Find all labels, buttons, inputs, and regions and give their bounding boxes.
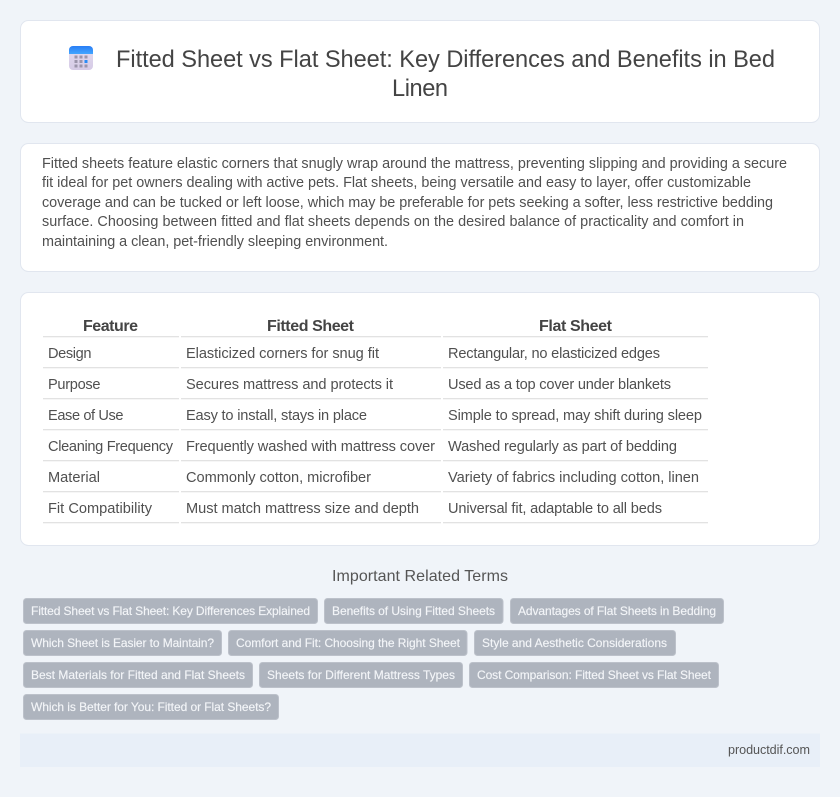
table row: cleaning frequency [48, 439, 677, 455]
tag: Best Materials for Fitted and Flat Sheets [31, 668, 245, 682]
tag [24, 630, 222, 656]
table row: purpose [48, 377, 671, 393]
tag [24, 694, 278, 720]
title: Linen [392, 76, 448, 102]
table row: cleaning frequency: Cleaning Frequency [48, 439, 174, 455]
table row: ease of use: Ease of Use [48, 408, 124, 424]
title [116, 47, 775, 102]
text block: introduction paragraph: maintaining a clean, pet-friendly sleeping environment. [42, 234, 388, 250]
table row: ease of use [48, 408, 702, 424]
table row: purpose: Purpose [48, 377, 100, 393]
footer [20, 734, 820, 767]
tag [24, 662, 252, 688]
panel: title card [20, 20, 820, 122]
footer source text: productdif.com [728, 743, 810, 757]
table row: ease of use: Easy to install, stays in place [186, 408, 367, 424]
tag: Cost Comparison: Fitted Sheet vs Flat Sheet [477, 668, 712, 682]
table row: material: Commonly cotton, microfiber [186, 470, 371, 486]
text block: introduction paragraph: fit ideal for pet owners dealing with active pets. Flat sheets, being versatile and easy to layer, offer customizable [42, 175, 751, 191]
tag [510, 598, 724, 624]
text block: introduction paragraph: Fitted sheets feature elastic corners that snugly wrap around the mattress, preventing slipping and providing a secure [42, 156, 787, 172]
table row: material [48, 470, 699, 486]
table row: cleaning frequency: Washed regularly as part of bedding [448, 439, 677, 455]
tag: Comfort and Fit: Choosing the Right Sheet [236, 636, 461, 650]
table row: fit compatibility [48, 501, 662, 517]
table row: material: Material [48, 470, 100, 486]
table header: Flat Sheet [539, 318, 613, 335]
table header: Feature [83, 318, 138, 335]
table row: fit compatibility: Must match mattress size and depth [186, 501, 419, 517]
table row: design: Elasticized corners for snug fit [186, 346, 379, 362]
tag [260, 662, 462, 688]
table header [83, 318, 613, 335]
tag [324, 598, 503, 624]
table row: design: Rectangular, no elasticized edges [448, 346, 660, 362]
tag: Benefits of Using Fitted Sheets [332, 604, 495, 618]
title: Fitted Sheet vs Flat Sheet: Key Differences and Benefits in Bed [116, 47, 775, 73]
tag [470, 662, 718, 688]
table row: purpose: Secures mattress and protects it [186, 377, 393, 393]
icon: calendar [69, 46, 93, 70]
panel: comparison table [20, 292, 820, 546]
table row: purpose: Used as a top cover under blankets [448, 377, 671, 393]
tag: Advantages of Flat Sheets in Bedding [518, 604, 716, 618]
table row: material: Variety of fabrics including cotton, linen [448, 470, 699, 486]
tag [24, 598, 318, 624]
text block: introduction paragraph: surface. Choosing between fitted and flat sheets depends on the desired balance of practicality and comfort in [42, 214, 744, 230]
tag: Style and Aesthetic Considerations [482, 636, 667, 650]
table row: design: Design [48, 346, 92, 362]
table row: fit compatibility: Fit Compatibility [48, 501, 153, 517]
panel: introduction [20, 144, 820, 272]
table row: cleaning frequency: Frequently washed with mattress cover [186, 439, 435, 455]
text block: introduction paragraph [42, 156, 787, 250]
tag: Fitted Sheet vs Flat Sheet: Key Differences Explained [31, 604, 310, 618]
tag: Sheets for Different Mattress Types [267, 668, 455, 682]
heading: important related terms: Important Related Terms [332, 568, 508, 585]
tag: Which is Better for You: Fitted or Flat Sheets? [31, 700, 271, 714]
text block: introduction paragraph: coverage and can be tucked or left loose, which may be preferable for pets seeking a softer, less restrictive bedding [42, 195, 773, 211]
table row: fit compatibility: Universal fit, adaptable to all beds [448, 501, 662, 517]
tag [474, 630, 676, 656]
table row: ease of use: Simple to spread, may shift during sleep [448, 408, 702, 424]
table header: Fitted Sheet [267, 318, 355, 335]
tag: Which Sheet is Easier to Maintain? [31, 636, 214, 650]
table row: design [48, 346, 660, 362]
tag list: related terms [24, 598, 724, 720]
tag [228, 630, 467, 656]
